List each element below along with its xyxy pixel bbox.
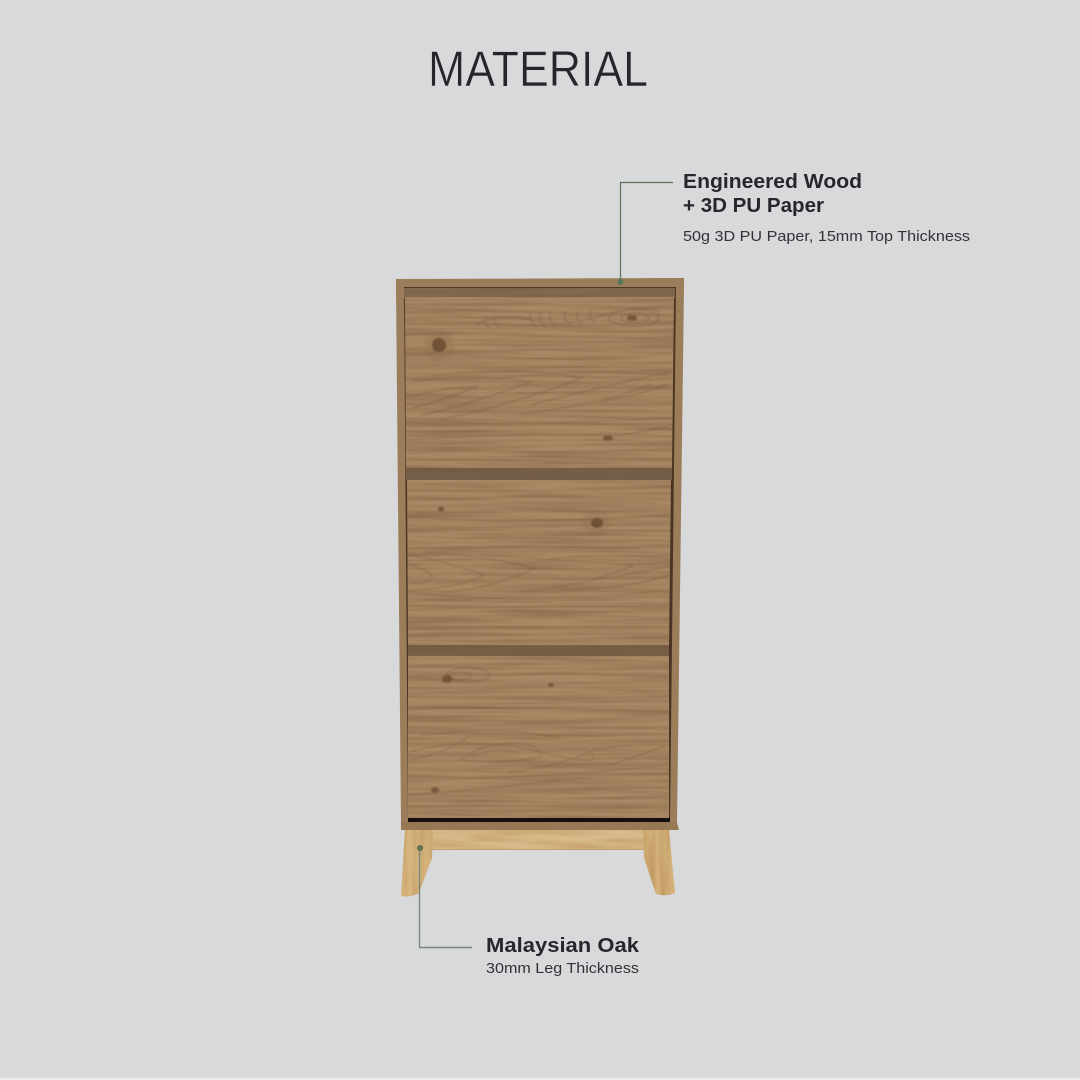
callout line: malaysian oak bbox=[417, 845, 472, 948]
cabinet frame bbox=[396, 278, 684, 830]
cabinet legs and plinth bbox=[400, 830, 677, 898]
middle recess band bbox=[406, 468, 672, 480]
title: MATERIAL bbox=[428, 41, 648, 97]
callout text: engineered wood: Engineered Wood bbox=[683, 171, 862, 193]
callout line: engineered wood bbox=[618, 182, 673, 285]
callout text: engineered wood: 50g 3D PU Paper, 15mm Top Thickness bbox=[683, 228, 970, 245]
callout text: malaysian oak: 30mm Leg Thickness bbox=[486, 960, 639, 977]
door 2 bbox=[406, 479, 672, 646]
callout text: engineered wood: + 3D PU Paper bbox=[683, 195, 824, 217]
callout text: malaysian oak: Malaysian Oak bbox=[486, 935, 640, 957]
top recess band bbox=[404, 288, 675, 298]
shoe cabinet illustration bbox=[396, 278, 684, 898]
callout text: malaysian oak bbox=[486, 935, 640, 977]
door 3 bbox=[407, 655, 670, 819]
lower recess band bbox=[408, 645, 669, 656]
callout text: engineered wood bbox=[683, 171, 970, 245]
door 1 bbox=[404, 296, 675, 469]
